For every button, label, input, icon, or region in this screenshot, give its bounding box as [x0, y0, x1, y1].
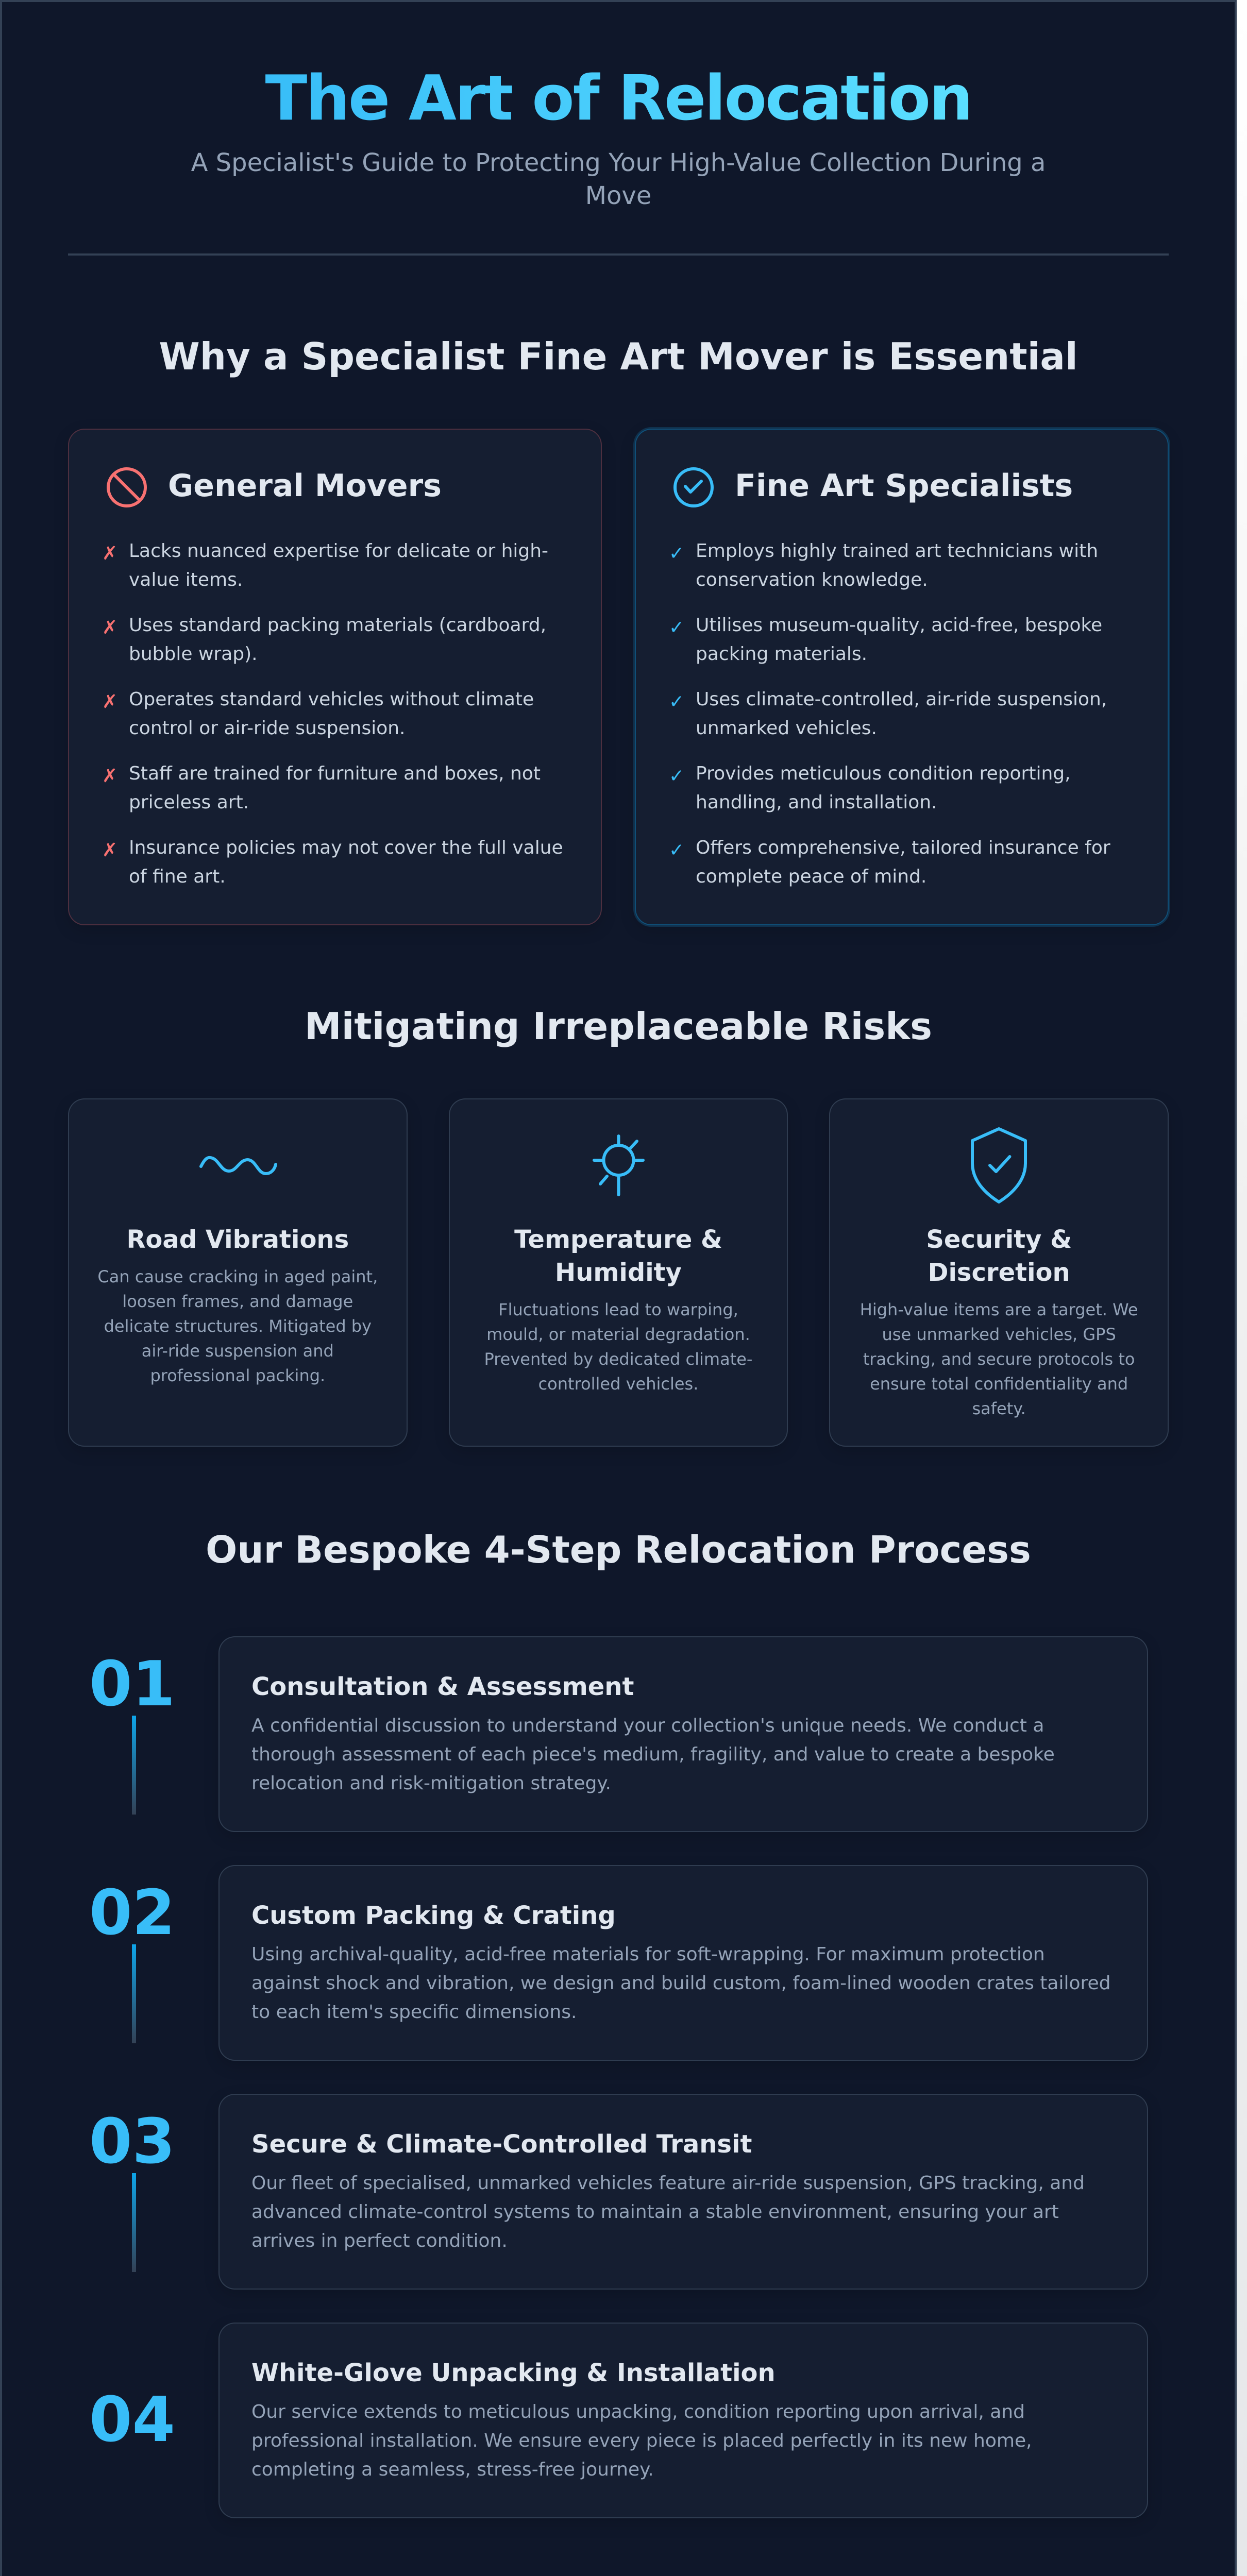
- connector: [132, 1944, 136, 2043]
- step card: [218, 2323, 1148, 2518]
- list item: technicians: Employs highly trained art technicians with: [696, 540, 1098, 562]
- list item: insurance: complete peace of mind.: [696, 866, 926, 887]
- list item: vehicles: ✓: [669, 691, 684, 713]
- icon: prohibited: [107, 467, 147, 507]
- step text: Our fleet of specialised, unmarked vehicles feature air-ride suspension, GPS tracking, and: [251, 2173, 1085, 2194]
- card text: safety.: [972, 1399, 1026, 1418]
- list item: materials: ✓: [669, 617, 684, 638]
- subtitle: [191, 148, 1046, 210]
- card text: [97, 1267, 378, 1385]
- card title: Temperature &: [514, 1225, 722, 1254]
- list item: reporting: Provides meticulous condition reporting,: [696, 763, 1071, 784]
- heading: why a specialist: Why a Specialist Fine Art Mover is Essential: [159, 335, 1078, 378]
- icon: check circle: [673, 467, 714, 507]
- heading: risks: Mitigating Irreplaceable Risks: [305, 1005, 932, 1048]
- list item: vehicles: unmarked vehicles.: [696, 718, 877, 739]
- card text: High-value items are a target. We: [860, 1300, 1138, 1319]
- list item: vehicles: Operates standard vehicles without climate: [129, 689, 534, 710]
- step title: Consultation & Assessment: [251, 1672, 634, 1701]
- panel: temperature and humidity: [449, 1098, 788, 1447]
- card text: ensure total confidentiality and: [870, 1374, 1128, 1394]
- card title: Road Vibrations: [126, 1225, 349, 1254]
- card text: [484, 1300, 752, 1394]
- list item: insurance: [669, 837, 1110, 887]
- list item: expertise: Lacks nuanced expertise for delicate or high-: [129, 540, 548, 562]
- step text: completing a seamless, stress-free journey.: [251, 2459, 654, 2480]
- step text: to each item's specific dimensions.: [251, 2002, 577, 2023]
- list item: reporting: [669, 763, 1071, 813]
- list item: staff: ✗: [102, 766, 117, 787]
- list item: insurance: of fine art.: [129, 866, 226, 887]
- step card: [218, 2094, 1148, 2290]
- card text: air-ride suspension and: [142, 1341, 334, 1361]
- card text: Fluctuations lead to warping,: [498, 1300, 738, 1319]
- card title: Discretion: [928, 1258, 1070, 1287]
- step 02: [89, 1865, 1148, 2061]
- step text: against shock and vibration, we design and build custom, foam-lined wooden crates tailored: [251, 1973, 1111, 1994]
- list item: technicians: [669, 540, 1098, 590]
- step card: [218, 1865, 1148, 2061]
- connector: [132, 2173, 136, 2272]
- list item: materials: ✗: [102, 617, 117, 638]
- list item: staff: Staff are trained for furniture and boxes, not: [129, 763, 541, 784]
- list item: vehicles: ✗: [102, 691, 117, 713]
- number: 03: [89, 2106, 175, 2178]
- step text: [251, 1715, 1055, 1794]
- card title: [926, 1225, 1072, 1287]
- panel: general movers: [68, 429, 602, 925]
- card text: professional packing.: [150, 1366, 325, 1385]
- card title: [514, 1225, 722, 1287]
- step text: relocation and risk-mitigation strategy.: [251, 1773, 611, 1794]
- number: 04: [89, 2384, 175, 2456]
- list item: insurance: [102, 837, 563, 887]
- list item: expertise: [102, 540, 548, 590]
- step title: Custom Packing & Crating: [251, 1901, 616, 1930]
- step text: professional installation. We ensure every piece is placed perfectly in its new home,: [251, 2430, 1032, 2451]
- list item: staff: [102, 763, 541, 813]
- list item: materials: packing materials.: [696, 643, 867, 665]
- card text: Can cause cracking in aged paint,: [97, 1267, 378, 1286]
- list item: vehicles: [669, 689, 1107, 739]
- list item: insurance: Offers comprehensive, tailored insurance for: [696, 837, 1110, 858]
- card title: Humidity: [555, 1258, 682, 1287]
- list item: materials: [669, 615, 1102, 665]
- icon: wave: [199, 1156, 277, 1175]
- step text: Using archival-quality, acid-free materials for soft-wrapping. For maximum protection: [251, 1944, 1045, 1965]
- card text: controlled vehicles.: [538, 1374, 698, 1394]
- step 01: [89, 1636, 1148, 1832]
- step title: Secure & Climate-Controlled Transit: [251, 2130, 752, 2159]
- step text: A confidential discussion to understand your collection's unique needs. We conduct a: [251, 1715, 1044, 1736]
- step card: [218, 1636, 1148, 1832]
- number: 02: [89, 1877, 175, 1949]
- subtitle: A Specialist's Guide to Protecting Your High-Value Collection During a: [191, 148, 1046, 177]
- card text: mould, or material degradation.: [486, 1325, 750, 1344]
- panel: road vibrations: [68, 1098, 408, 1447]
- list item: vehicles: control or air-ride suspension.: [129, 718, 405, 739]
- list item: reporting: ✓: [669, 766, 684, 787]
- icon: sun: [593, 1134, 645, 1196]
- step text: thorough assessment of each piece's medium, fragility, and value to create a bespoke: [251, 1744, 1055, 1765]
- list item: materials: Utilises museum-quality, acid-free, bespoke: [696, 615, 1102, 636]
- list item: vehicles: [102, 689, 534, 739]
- title: The Art of Relocation: [265, 63, 971, 134]
- list item: expertise: value items.: [129, 569, 243, 590]
- list item: materials: Uses standard packing materials (cardboard,: [129, 615, 546, 636]
- list item: insurance: ✓: [669, 840, 684, 861]
- list item: technicians: conservation knowledge.: [696, 569, 928, 590]
- step text: Our service extends to meticulous unpacking, condition reporting upon arrival, and: [251, 2401, 1025, 2422]
- heading: process: Our Bespoke 4-Step Relocation Process: [206, 1528, 1031, 1571]
- list item: materials: [102, 615, 546, 665]
- connector: [132, 1716, 136, 1815]
- panel heading: general movers: General Movers: [168, 468, 442, 504]
- step 03: [89, 2094, 1148, 2290]
- list item: expertise: ✗: [102, 543, 117, 564]
- card text: [860, 1300, 1138, 1418]
- card title: Security &: [926, 1225, 1072, 1254]
- card text: tracking, and secure protocols to: [863, 1349, 1135, 1369]
- card text: delicate structures. Mitigated by: [104, 1316, 372, 1336]
- step text: [251, 2169, 1085, 2256]
- card text: loosen frames, and damage: [122, 1292, 353, 1311]
- panel: security and discretion: [829, 1098, 1169, 1447]
- step text: advanced climate-control systems to maintain a stable environment, ensuring your art: [251, 2201, 1059, 2223]
- list item: insurance: Insurance policies may not cover the full value: [129, 837, 563, 858]
- icon: shield: [971, 1127, 1027, 1204]
- step text: arrives in perfect condition.: [251, 2230, 508, 2251]
- panel heading: fine art specialists: Fine Art Specialists: [735, 468, 1073, 504]
- number: 01: [89, 1649, 175, 1720]
- list item: materials: bubble wrap).: [129, 643, 258, 665]
- step title: White-Glove Unpacking & Installation: [251, 2359, 776, 2387]
- subtitle: Move: [585, 181, 651, 210]
- card text: use unmarked vehicles, GPS: [882, 1325, 1116, 1344]
- step text: [251, 1944, 1111, 2023]
- list item: insurance: ✗: [102, 840, 117, 861]
- list item: staff: priceless art.: [129, 792, 249, 813]
- list item: vehicles: Uses climate-controlled, air-ride suspension,: [696, 689, 1107, 710]
- step 04: [89, 2323, 1148, 2518]
- card text: Prevented by dedicated climate-: [484, 1349, 752, 1369]
- list item: reporting: handling, and installation.: [696, 792, 937, 813]
- panel: fine art specialists: [635, 429, 1169, 925]
- step text: [251, 2398, 1032, 2484]
- list item: technicians: ✓: [669, 543, 684, 564]
